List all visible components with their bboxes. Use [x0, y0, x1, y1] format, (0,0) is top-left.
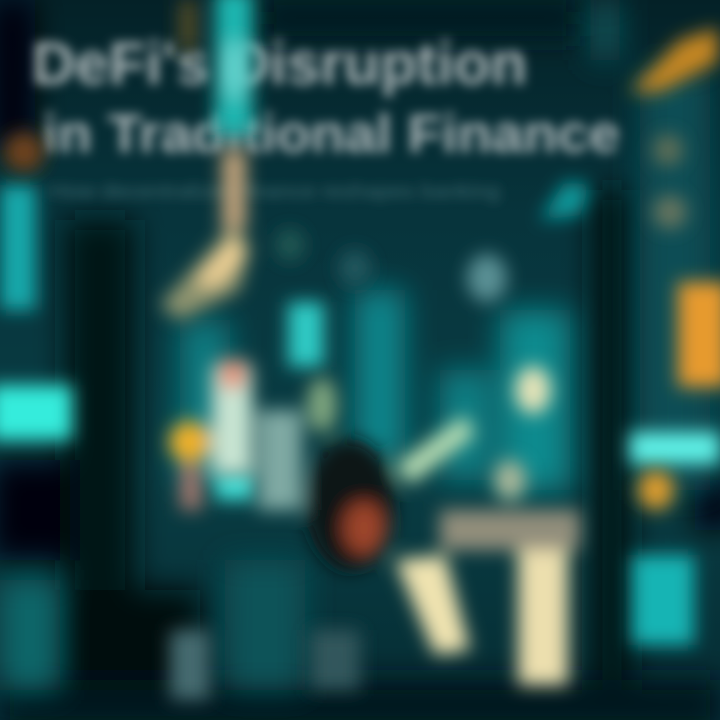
central figure and warm accents	[160, 150, 580, 700]
bright cyan shapes	[0, 182, 720, 645]
right figure	[395, 415, 475, 485]
title: in Traditional Finance	[42, 104, 620, 164]
central teal column over title	[180, 0, 253, 135]
dark figure	[306, 439, 394, 571]
title: DeFi's Disruption	[32, 30, 527, 97]
subtitle: How decentralized finance reshapes banking	[50, 181, 500, 203]
arm	[160, 225, 250, 320]
orange accents	[4, 28, 720, 510]
legs	[440, 510, 580, 550]
title	[32, 30, 620, 164]
